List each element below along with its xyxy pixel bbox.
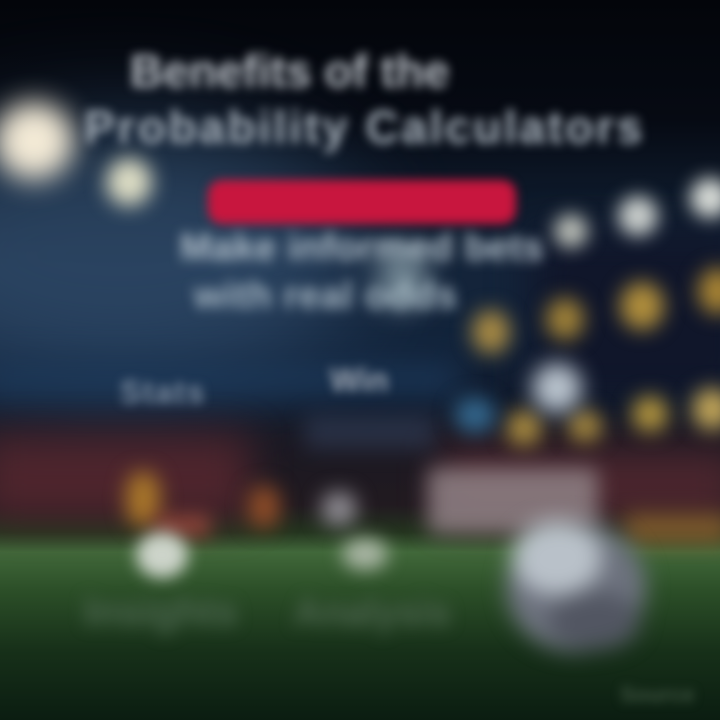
accent: red bit near ball: [155, 514, 210, 538]
field text: bottom right: Source: [620, 682, 695, 707]
crowd: red stands right: [440, 450, 720, 520]
field text: center block: Analysis: [294, 592, 450, 634]
floodlight: large left: [0, 102, 74, 180]
crowd: red stands left: [0, 435, 250, 520]
figure: orange left: [126, 472, 160, 526]
title: [80, 45, 647, 159]
figure: orange center: [248, 486, 280, 528]
text: center small block: [305, 415, 435, 449]
stadium flare: white and blue: [444, 348, 597, 444]
background band: right side dark stands: [530, 230, 720, 400]
label: left stat: Stats: [120, 374, 206, 410]
football: large foreground: [494, 508, 658, 664]
background band: blue stand tier: [0, 362, 460, 398]
accent: right orange strip: [625, 514, 720, 544]
ball: center: [342, 538, 388, 570]
glare on subtitle: [378, 248, 428, 308]
label: center stat: Win: [330, 362, 388, 398]
title: Probability Calculators: [84, 101, 645, 153]
subtitle text block: [174, 226, 550, 317]
subtitle text block: Make informed bets: [180, 227, 544, 269]
figure: white center: [322, 492, 356, 526]
ball: left: [136, 532, 188, 578]
red banner: [208, 180, 516, 224]
title: Benefits of the: [130, 45, 449, 97]
floodlight: small left: [106, 158, 152, 206]
field text: left block: Insights: [84, 590, 237, 634]
goal net: [428, 468, 598, 534]
subtitle text block: with real odds: [194, 275, 458, 317]
background glow: stadium sky: [0, 120, 360, 390]
